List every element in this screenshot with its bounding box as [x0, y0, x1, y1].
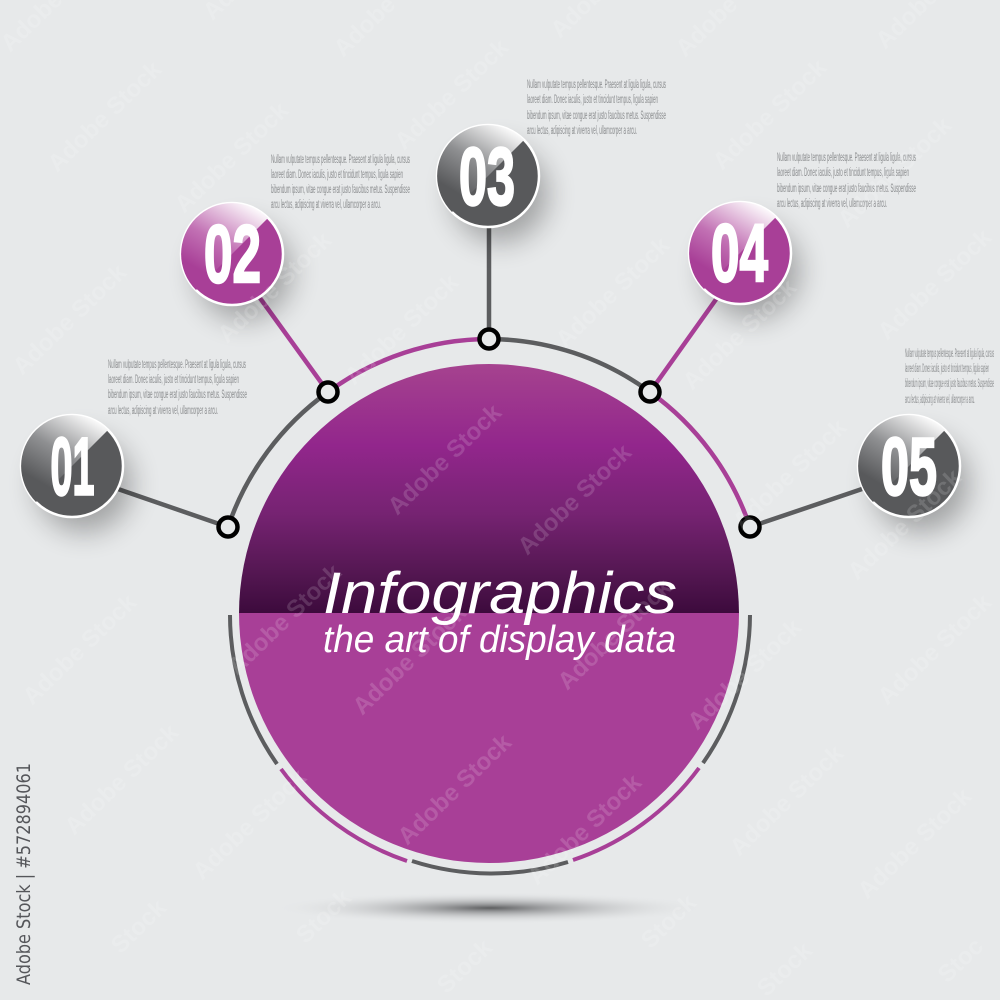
badge 01: 01 [50, 422, 94, 512]
watermarks: Adobe Stock [170, 96, 294, 218]
badge 02 [181, 203, 292, 320]
watermarks: Adobe Stock [340, 268, 464, 390]
watermarks: Adobe Stock [833, 111, 957, 233]
badge 03: 03 [459, 132, 515, 222]
text: laoreet diam. Donec iaculis, justo et tincidunt tempus, ligula sapien [527, 94, 658, 106]
upper arc segments [228, 339, 750, 527]
text: arcu lectus, adipiscing at viverra vel, ullamcorper a arcu. [108, 405, 218, 417]
watermarks: Adobe Stock [678, 273, 802, 395]
watermarks: Adobe Stock [390, 33, 514, 155]
badge 01 [21, 415, 132, 532]
text: laoreet diam. Donec iaculis, justo et tincidunt tempus, ligula sapien [108, 374, 239, 386]
watermarks: Stoc [933, 933, 989, 988]
watermarks: Stock [106, 894, 172, 959]
text: bibendum ipsum, vitae congue erat justo faucibus metus. Suspendisse [271, 184, 410, 196]
text: laoreet diam. Donec iaculis, justo et tincidunt tempus, ligula sapien [271, 169, 403, 181]
watermarks: Adobe Stock [383, 398, 507, 520]
watermarks: Adobe Stock [873, 588, 997, 710]
badge 03 [437, 125, 548, 242]
badge 05 [858, 415, 969, 532]
watermarks: Adobe Stock [188, 763, 312, 885]
lower ring segments [230, 615, 750, 873]
watermarks: Adobe Stock [725, 739, 849, 861]
text block 04 [777, 152, 916, 210]
watermarks: Stock [636, 889, 702, 954]
arc nodes [218, 330, 760, 536]
watermarks: Adobe Stock [728, 413, 852, 535]
watermarks: Adobe Stock [553, 573, 677, 695]
connector lines [118, 226, 862, 527]
watermarks: Adobe Stock [513, 438, 637, 560]
text block 03 [527, 79, 666, 137]
watermarks: Stock [432, 934, 498, 999]
text block 01 [108, 359, 247, 417]
watermarks: Adobe Stock [18, 588, 142, 710]
watermarks: Adobe Stock [43, 55, 167, 177]
watermarks: Stock [291, 884, 357, 949]
badge 05: 05 [881, 422, 937, 512]
watermarks: Adobe Stock [8, 258, 132, 380]
watermarks: Adobe Stock [60, 718, 184, 840]
watermarks: Adobe Stock [843, 463, 967, 585]
badge 02: 02 [204, 209, 261, 300]
floor shadow [272, 892, 708, 924]
central disc [239, 364, 739, 863]
watermarks: Adobe Stock [523, 768, 647, 890]
text: arcu lectus, adipiscing at viverra vel, ullamcorper a arcu. [271, 199, 381, 211]
text: arcu lectus, adipiscing at viverra vel, ullamcorper a arcu. [527, 125, 637, 137]
text: Nullam vulputate tempus pellentesque. Praesent at ligula ligula, cursus [527, 79, 666, 91]
text: bibendum ipsum, vitae congue erat justo faucibus metus. Suspendisse [527, 110, 666, 122]
watermarks: Adobe Stock [348, 598, 472, 720]
text: Nullam vulputate tempus pellentesque. Praesent at ligula ligula, cursus [271, 154, 410, 166]
watermarks: Adobe Stock [213, 226, 337, 348]
watermarks: Adobe Stock [223, 558, 347, 680]
watermarks: Adobe Stock [873, 223, 997, 345]
watermarks: Adobe Stock [708, 53, 832, 175]
text: Nullam vulputate tempus pellentesque. Praesent at ligula ligula, cursus [108, 359, 246, 371]
stock id label: Adobe Stock | #572894061 [13, 763, 35, 985]
subtitle: the art of display data [323, 619, 676, 661]
badge 04: 04 [711, 208, 768, 299]
text block 05 [905, 348, 994, 406]
badge 04 [689, 202, 800, 319]
watermarks: Adobe Stock [551, 231, 675, 353]
watermarks: Adobe Stock [853, 782, 977, 904]
watermarks: Adobe Stock [393, 728, 517, 850]
watermarks: Adobe Stock [683, 613, 807, 735]
text block 02 [271, 154, 410, 211]
title: Infographics [323, 561, 677, 626]
text: bibendum ipsum, vitae congue erat justo faucibus metus. Suspendisse [108, 389, 247, 401]
